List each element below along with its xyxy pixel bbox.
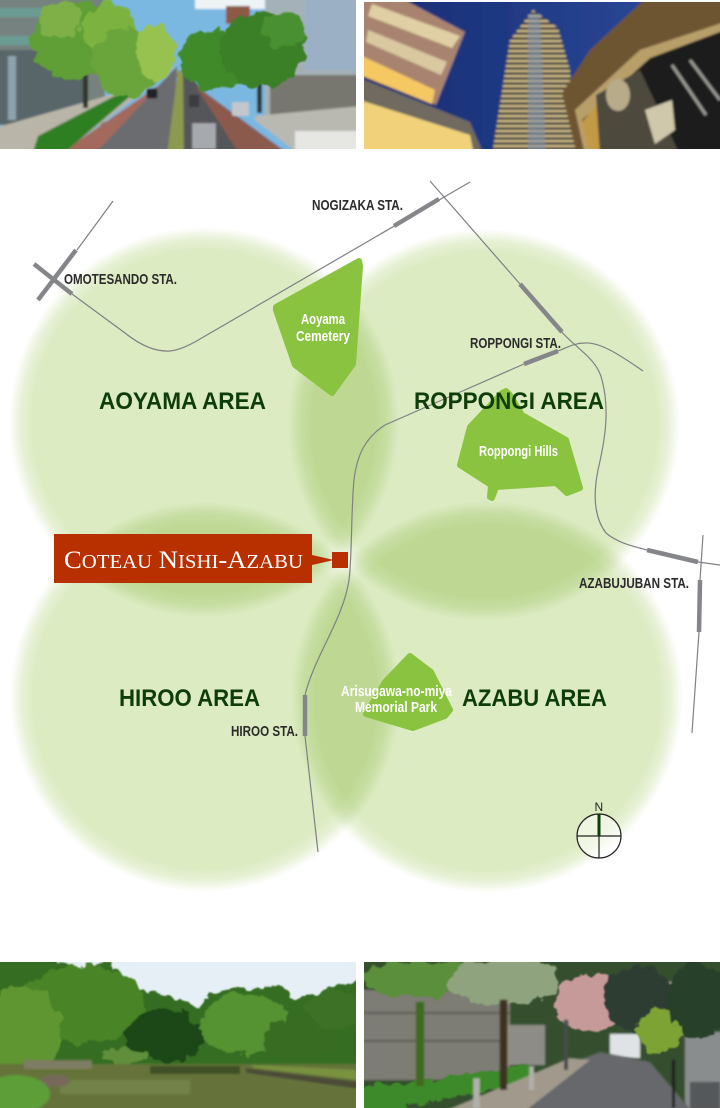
photo: Arisugawa park pond bbox=[0, 955, 366, 1108]
park label: Arisugawa-no-miya Memorial Park bbox=[341, 683, 453, 716]
rail line: Azabujuban vertical bbox=[692, 535, 703, 733]
station label: Omotesando: OMOTESANDO STA. bbox=[64, 271, 177, 288]
circle: Roppongi area bbox=[288, 229, 680, 621]
area label: Azabu: AZABU AREA bbox=[462, 685, 607, 712]
park label: Roppongi Hills: Roppongi Hills bbox=[479, 443, 558, 460]
circle: Azabu area bbox=[291, 501, 683, 893]
station label: Roppongi: ROPPONGI STA. bbox=[470, 335, 561, 352]
area label: Roppongi: ROPPONGI AREA bbox=[414, 388, 604, 415]
rail line: Roppongi to Hiroo bbox=[305, 343, 643, 852]
park: Roppongi Hills bbox=[460, 391, 580, 498]
park label: Arisugawa-no-miya Memorial Park: Memorial Park bbox=[355, 699, 438, 716]
area label: Aoyama: AOYAMA AREA bbox=[99, 388, 266, 415]
callout: Coteau Nishi-Azabu location: COTEAU NISHI-AZABU bbox=[64, 547, 303, 574]
icon: north compass bbox=[577, 800, 621, 858]
park: Aoyama Cemetery bbox=[276, 261, 360, 393]
callout: Coteau Nishi-Azabu location bbox=[54, 534, 348, 583]
rail line: Roppongi to Azabujuban bbox=[430, 181, 720, 565]
rail line: Omotesando to Nogizaka bbox=[34, 182, 470, 351]
icon: north compass: N bbox=[594, 800, 603, 814]
photo: Roppongi Hills tower at dusk bbox=[364, 2, 720, 149]
park label: Aoyama Cemetery: Aoyama bbox=[301, 311, 345, 328]
circle: Hiroo area bbox=[10, 502, 400, 892]
circle: Aoyama area bbox=[9, 227, 399, 617]
station label: Hiroo: HIROO STA. bbox=[231, 723, 298, 740]
photo: tree-lined avenue bbox=[0, 0, 366, 160]
park: Arisugawa-no-miya Memorial Park bbox=[366, 656, 450, 728]
station label: Azabujuban: AZABUJUBAN STA. bbox=[579, 575, 689, 592]
area label: Hiroo: HIROO AREA bbox=[119, 685, 260, 712]
station label: Nogizaka: NOGIZAKA STA. bbox=[312, 197, 403, 214]
park label: Arisugawa-no-miya Memorial Park: Arisugawa-no-miya bbox=[341, 683, 453, 700]
map area circles bbox=[9, 227, 683, 893]
park label: Aoyama Cemetery bbox=[296, 311, 351, 345]
park label: Aoyama Cemetery: Cemetery bbox=[296, 328, 351, 345]
photo: tree-lined residential street bbox=[354, 955, 720, 1108]
